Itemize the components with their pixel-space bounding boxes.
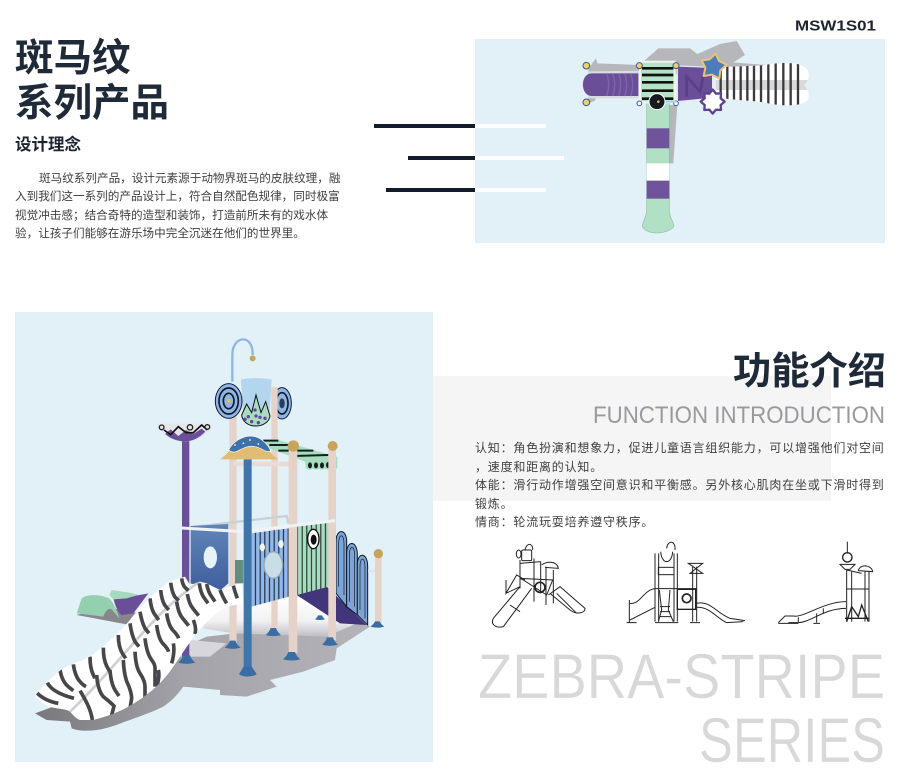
purple stair ramp (297, 587, 367, 625)
line drawing: side view (778, 542, 873, 623)
striped canopy (262, 439, 337, 470)
panel: grey band behind function heading (433, 376, 831, 501)
title (15, 37, 169, 125)
subheading: design concept: 设计理念 (15, 136, 81, 154)
back slide exit (77, 590, 148, 625)
arched side panels (336, 532, 368, 625)
green inner module (235, 560, 243, 583)
illustration: main play structure (35, 338, 384, 731)
panel: top-view background (475, 39, 885, 243)
text block: function description: 情商：轮流玩耍培养遵守秩序。 (475, 515, 654, 529)
zebra stripe slide (35, 576, 244, 720)
white star badge (701, 90, 725, 114)
english subheading: FUNCTION INTRODUCTION (593, 402, 885, 429)
title: 系列产品 (15, 82, 169, 125)
green striped panel with eye (297, 523, 329, 595)
product code: MSW1S01 (795, 18, 876, 34)
corner post caps (583, 62, 679, 106)
left target disc (215, 384, 242, 418)
front right posts (283, 440, 338, 660)
text block: function description (475, 441, 885, 529)
text block: design concept (15, 172, 340, 240)
light floor patch (180, 640, 227, 657)
centre striped panel (252, 528, 289, 607)
back railing (190, 516, 288, 527)
left purple slide (583, 71, 640, 98)
text block: design concept: 斑马纹系列产品，设计元素源于动物界斑马的皮肤纹理，融 (39, 172, 340, 185)
tower roof with stripes (640, 62, 675, 102)
line drawing: perspective view (492, 544, 585, 627)
text block: function description: 认知：角色扮演和想象力，促进儿童语言组织能力，可以增强他们对空间 (475, 441, 885, 455)
text block: function description: ，速度和距离的认知。 (475, 460, 603, 474)
text block: function description: 锻炼。 (475, 496, 513, 510)
ground shadow (35, 620, 370, 731)
blue star (702, 54, 727, 79)
bucket (241, 378, 272, 426)
purple post with bowl (157, 424, 213, 657)
lower green slide (642, 103, 674, 233)
back crossbar (233, 462, 290, 466)
heading: function introduction: 功能介绍 (733, 350, 886, 393)
mushroom roof (220, 436, 278, 459)
text block: function description: 体能：滑行动作增强空间意识和平衡感。另外核心肌肉在坐或下滑时得到 (475, 478, 885, 492)
title: 斑马纹 (15, 37, 131, 80)
blue front post (239, 459, 257, 676)
panel: main illustration background (15, 312, 433, 762)
base of purple post (178, 655, 195, 664)
floor glow (203, 597, 357, 637)
illustration: top view of play structure (582, 41, 809, 234)
post in front of bucket (271, 387, 278, 421)
zebra slide seen from above (716, 63, 809, 106)
right purple deck (677, 66, 713, 102)
text block: design concept: 视觉冲击感；结合奇特的造型和装饰，打造前所未有的戏水体 (15, 209, 328, 222)
decorative lines group (374, 124, 564, 192)
text block: design concept: 验，让孩子们能够在游乐场中完全沉迷在他们的世界里。 (15, 227, 305, 240)
top view shadow (587, 41, 767, 163)
right target disc (273, 388, 291, 419)
black hub with bar (649, 94, 677, 110)
white railing (182, 521, 335, 532)
text block: design concept: 入到我们这一系列的产品设计上，符合自然配色规律，同时极富 (15, 190, 340, 203)
short side post (368, 549, 384, 628)
left panel with porthole (191, 524, 228, 593)
back posts (225, 387, 325, 649)
line drawing: front view (627, 542, 745, 623)
hook with ball (232, 339, 256, 382)
